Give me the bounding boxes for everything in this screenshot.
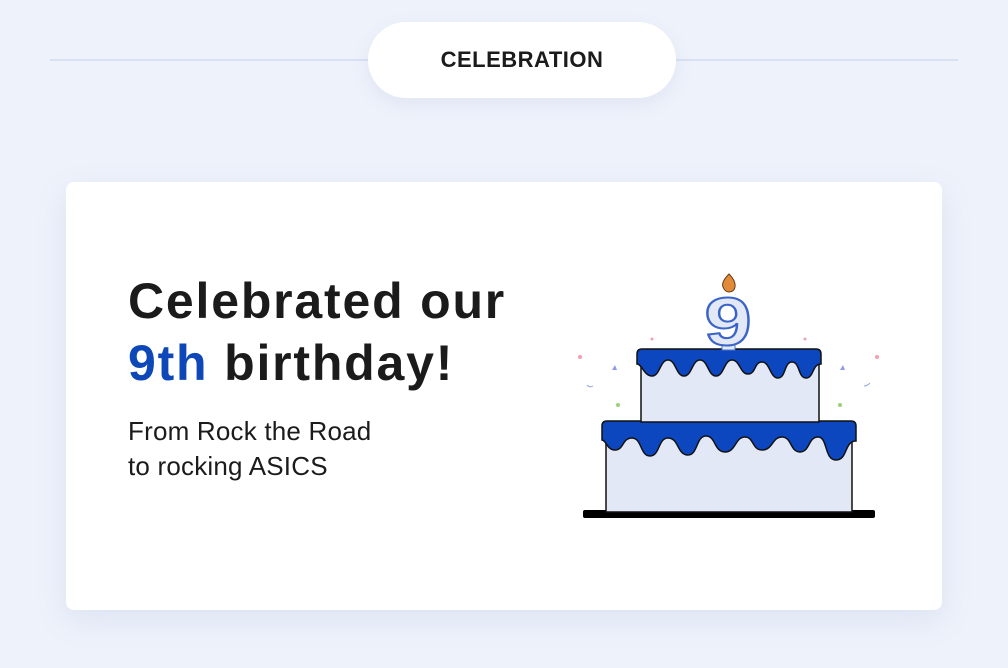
subtitle <box>128 416 371 481</box>
top tier <box>641 352 819 422</box>
bottom tier <box>606 425 852 512</box>
subtitle: From Rock the Road <box>128 416 371 446</box>
plate <box>583 510 875 518</box>
heading: 9th birthday! <box>128 335 454 391</box>
header pill: CELEBRATION: CELEBRATION <box>441 47 603 72</box>
heading: Celebrated our <box>128 273 506 329</box>
heading <box>128 273 506 391</box>
candle 9 with flame: 9 <box>704 284 752 360</box>
header pill: CELEBRATION <box>368 22 676 98</box>
confetti <box>578 338 879 407</box>
subtitle: to rocking ASICS <box>128 451 328 481</box>
panel: card <box>66 182 942 610</box>
